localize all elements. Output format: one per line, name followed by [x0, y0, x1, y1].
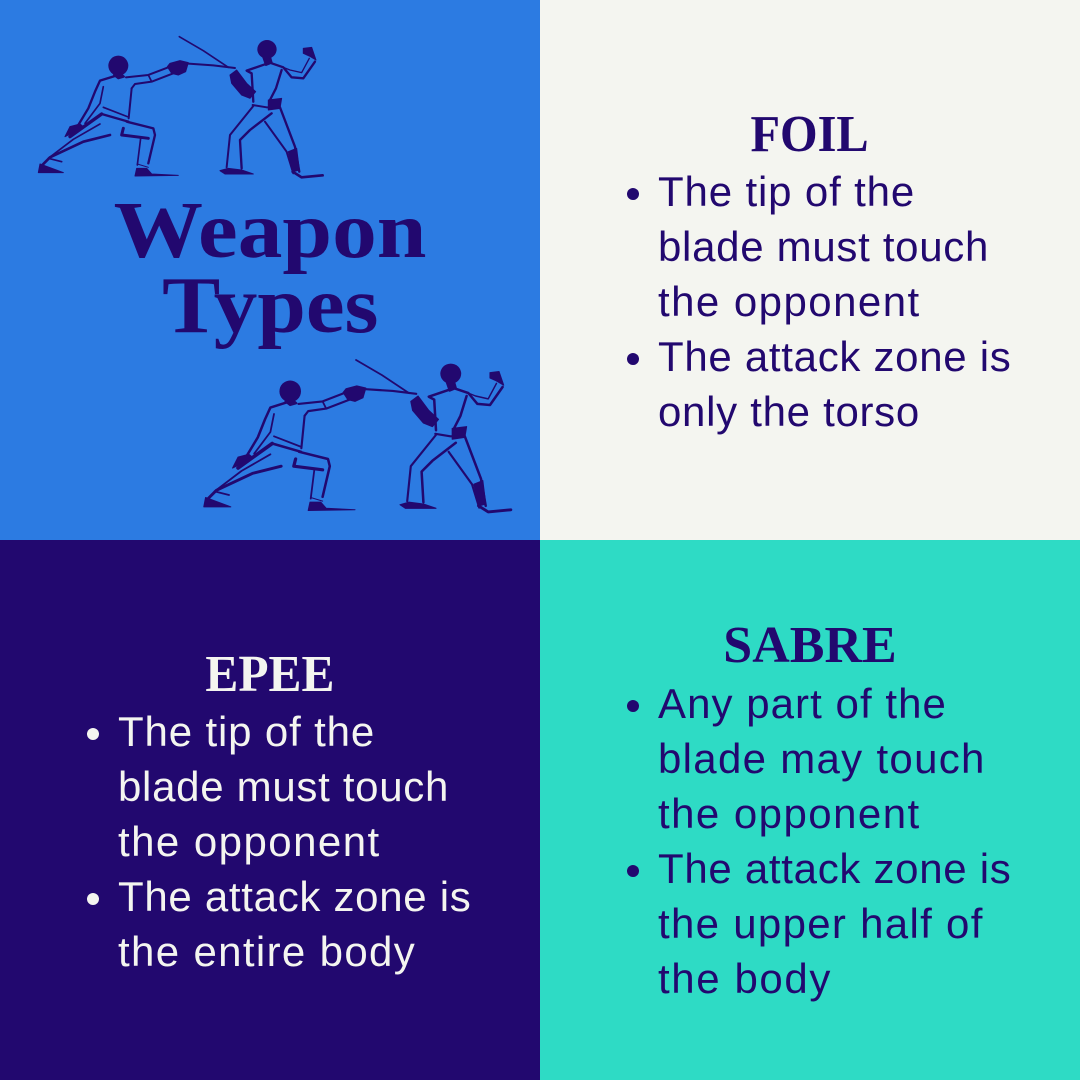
- panel: foil: [540, 0, 1080, 540]
- text: sabre bullets: the upper half of: [658, 900, 984, 947]
- text: sabre bullets: the body: [658, 955, 832, 1002]
- panel: title: [0, 0, 540, 540]
- heading: Weapon Types: Types: [162, 262, 378, 350]
- panel: sabre: [540, 540, 1080, 1080]
- text: sabre bullets: [627, 680, 1011, 1002]
- text: foil bullets: The tip of the: [658, 168, 915, 215]
- heading: Weapon Types: [114, 187, 426, 350]
- panel: epee: [0, 540, 540, 1080]
- text: foil bullets: the opponent: [658, 278, 921, 325]
- text: sabre bullets: Any part of the: [658, 680, 947, 727]
- text: foil bullets: blade must touch: [658, 223, 989, 270]
- text: sabre bullets: The attack zone is: [658, 845, 1011, 892]
- text: foil bullets: The attack zone is: [658, 333, 1011, 380]
- text: foil bullets: [627, 168, 1011, 435]
- text: epee bullets: the entire body: [118, 928, 416, 975]
- heading: Weapon Types: Weapon: [114, 187, 426, 275]
- icon: fencers top: [38, 36, 512, 514]
- icon: fencers bottom: [204, 360, 511, 512]
- text: epee bullets: The attack zone is: [118, 873, 471, 920]
- text: sabre bullets: blade may touch: [658, 735, 986, 782]
- text: epee bullets: The tip of the: [118, 708, 375, 755]
- text: epee bullets: the opponent: [118, 818, 381, 865]
- text: epee bullets: blade must touch: [118, 763, 449, 810]
- heading: EPEE: EPEE: [205, 646, 335, 703]
- text: epee bullets: [87, 708, 471, 975]
- text: sabre bullets: the opponent: [658, 790, 921, 837]
- text: foil bullets: only the torso: [658, 388, 920, 435]
- heading: SABRE: SABRE: [723, 617, 897, 674]
- heading: FOIL: FOIL: [751, 106, 869, 163]
